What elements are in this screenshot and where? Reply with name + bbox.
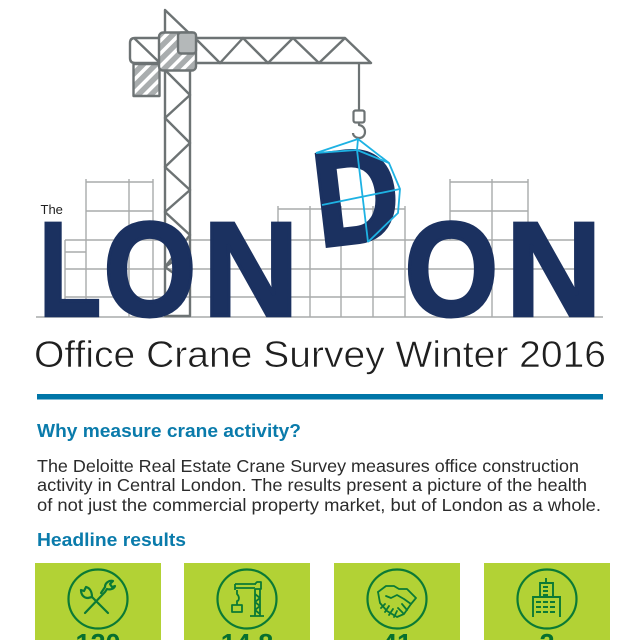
icon: crane: [218, 570, 276, 628]
counter jib: [130, 38, 160, 63]
title word: LONDON: [39, 117, 602, 344]
body paragraph: [37, 456, 601, 515]
heading: headline results: Headline results: [37, 530, 186, 550]
label: The: The: [40, 202, 63, 217]
hanging letter D: D: [305, 117, 407, 275]
icon: office building: [518, 570, 576, 628]
cab window: [178, 32, 196, 54]
subtitle: Office Crane Survey Winter 2016: [34, 334, 606, 375]
wireframe over D: [316, 139, 400, 242]
card: 2: [484, 563, 610, 640]
crane jib: [195, 38, 371, 63]
crane cab: [159, 32, 196, 70]
title word: LONDON: L: [39, 196, 101, 344]
card: 41: [334, 563, 460, 640]
divider rule: [37, 394, 603, 400]
card: 14.8: [184, 563, 310, 640]
crane mast: [165, 70, 190, 316]
card: 120: [35, 563, 161, 640]
heading: why measure: Why measure crane activity?: [37, 421, 301, 441]
tower crane: [130, 10, 371, 316]
crane apex: [165, 10, 190, 36]
title word: LONDON: N: [203, 196, 299, 344]
title word: LONDON: N: [506, 196, 602, 344]
icon: handshake: [368, 570, 426, 628]
building scaffold grid: [36, 179, 603, 317]
cable and hook: [353, 63, 365, 138]
counterweight: [134, 64, 160, 96]
icon: tools: [68, 570, 128, 628]
body paragraph: of not just the commercial property market, but of London as a whole.: [37, 495, 601, 515]
title word: LONDON: O: [104, 196, 196, 344]
title word: LONDON: O: [404, 196, 498, 344]
body paragraph: The Deloitte Real Estate Crane Survey measures office construction: [37, 456, 579, 476]
body paragraph: activity in Central London. The results present a picture of the health: [37, 475, 587, 495]
